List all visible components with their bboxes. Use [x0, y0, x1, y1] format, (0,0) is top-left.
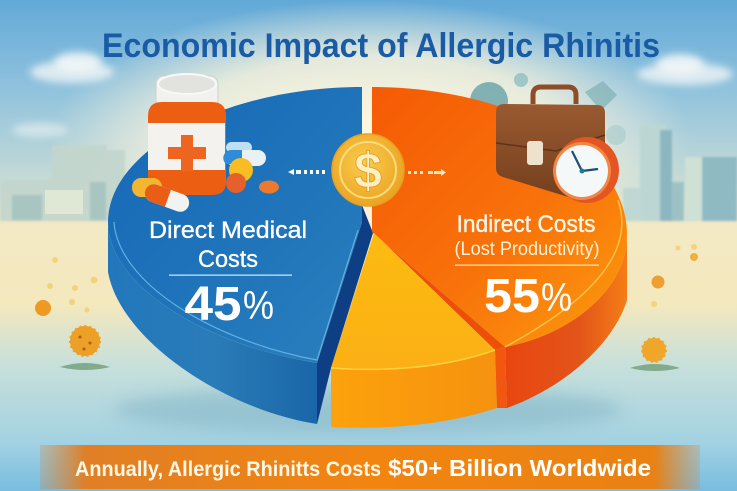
- label: indirect costs: (Lost Productivity): [454, 239, 600, 260]
- pie chart: [108, 87, 627, 428]
- slice: direct medical costs: [108, 87, 373, 424]
- pie shadow: [113, 386, 623, 434]
- label: direct medical costs: 45: [184, 278, 242, 331]
- label: indirect costs: Indirect Costs: [456, 211, 596, 238]
- bottom banner: $50+ Billion Worldwide: [388, 455, 651, 481]
- label: direct medical costs: %: [243, 284, 274, 328]
- bottom banner: [40, 445, 700, 489]
- icon: medicine bottle and pills: [132, 74, 279, 214]
- icon: briefcase and clock: [496, 87, 619, 203]
- icon: dollar coin: [332, 134, 404, 206]
- arrow: to direct costs: [288, 169, 325, 175]
- arrow: to indirect costs: [408, 169, 446, 176]
- label: direct medical costs: Direct Medical: [149, 217, 307, 244]
- label: direct medical costs: Costs: [198, 246, 258, 273]
- icon: dollar coin: $: [354, 143, 382, 199]
- label: indirect costs: 55: [484, 270, 540, 323]
- bottom banner: Annually, Allergic Rhinitts Costs: [75, 458, 381, 481]
- label: indirect costs: [454, 211, 600, 323]
- title: Economic Impact of Allergic Rhinitis: [102, 27, 660, 65]
- slice: indirect costs: [372, 87, 627, 408]
- label: indirect costs: %: [541, 276, 572, 320]
- label: direct medical costs: [149, 217, 307, 331]
- slice: yellow wedge: [331, 233, 497, 428]
- decorative gears: [459, 73, 626, 145]
- pollen flowers: [35, 253, 698, 371]
